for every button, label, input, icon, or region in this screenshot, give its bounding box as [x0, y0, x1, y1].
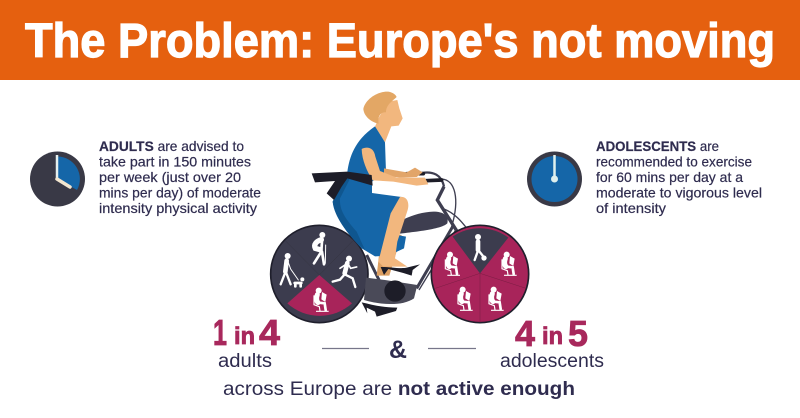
woman — [312, 92, 428, 276]
skirt back shade — [333, 172, 365, 250]
text block: adolescents guidance: recommended to exercise — [596, 154, 752, 170]
text block: adolescents guidance: moderate to vigorous level — [596, 184, 762, 200]
icon: footballer — [475, 234, 487, 261]
clock icon: adults 150 minutes — [30, 152, 85, 206]
text block: adolescents guidance: of intensity — [596, 200, 666, 216]
statistic: 4 in 5 adolescents: adolescents — [500, 351, 604, 372]
title: The Problem: Europe's not moving — [25, 15, 775, 68]
neck and head — [375, 100, 403, 142]
icon: seated teen left — [445, 252, 460, 275]
text block: adults guidance: intensity physical activity — [99, 200, 257, 216]
icon: seated teen right — [502, 252, 517, 275]
left wheel — [271, 225, 368, 323]
cyclist illustration — [271, 92, 529, 323]
icon: dog walker — [281, 253, 304, 286]
sash — [312, 172, 373, 200]
statistic: 4 in 5 adolescents — [500, 313, 604, 372]
text block: adults guidance: per week (just over 20 — [99, 169, 241, 185]
statistic: 4 in 5 adolescents: 5 — [568, 313, 588, 354]
dress — [333, 126, 406, 256]
header banner — [0, 0, 800, 80]
upper shoe — [381, 264, 420, 276]
back arm hand — [384, 168, 423, 178]
icon: seated person with book — [314, 288, 329, 311]
statistic: 4 in 5 adolescents: 4 — [515, 313, 535, 354]
icon: runner — [333, 256, 357, 287]
text block: adults guidance: take part in 150 minutes — [99, 154, 251, 170]
back leg and lower shoe — [362, 232, 402, 317]
closing statement: across Europe are not active enough — [223, 378, 575, 400]
text block: adults guidance — [99, 138, 261, 216]
icon: hiker — [314, 232, 326, 264]
statistic: 1 in 4 adults: adults — [218, 351, 272, 372]
statistic: 1 in 4 adults: 4 — [259, 312, 280, 353]
text block: adolescents guidance: for 60 mins per day at a — [596, 169, 743, 185]
right wheel — [431, 225, 529, 323]
text block: adults guidance: ADULTS are advised to — [99, 138, 244, 154]
statistic: 4 in 5 adolescents: in — [542, 323, 563, 350]
icon: seated teen lower left — [458, 287, 473, 310]
text block: adults guidance: mins per day) of moderate — [99, 184, 261, 200]
ampersand with rules: & — [389, 336, 407, 364]
statistic: 1 in 4 adults — [213, 312, 280, 372]
statistic: 1 in 4 adults: 1 — [213, 312, 227, 353]
text block: adolescents guidance — [596, 138, 762, 216]
icon: seated teen lower right — [489, 287, 504, 310]
statistic: 1 in 4 adults: in — [234, 323, 255, 350]
clock icon: adolescents 60 minutes — [527, 152, 582, 206]
front arm — [362, 148, 428, 186]
crank housing and chainring — [364, 278, 417, 304]
bicycle frame — [367, 173, 467, 290]
text block: adolescents guidance: ADOLESCENTS are — [596, 138, 719, 154]
hair — [363, 92, 397, 124]
front leg — [378, 197, 408, 267]
